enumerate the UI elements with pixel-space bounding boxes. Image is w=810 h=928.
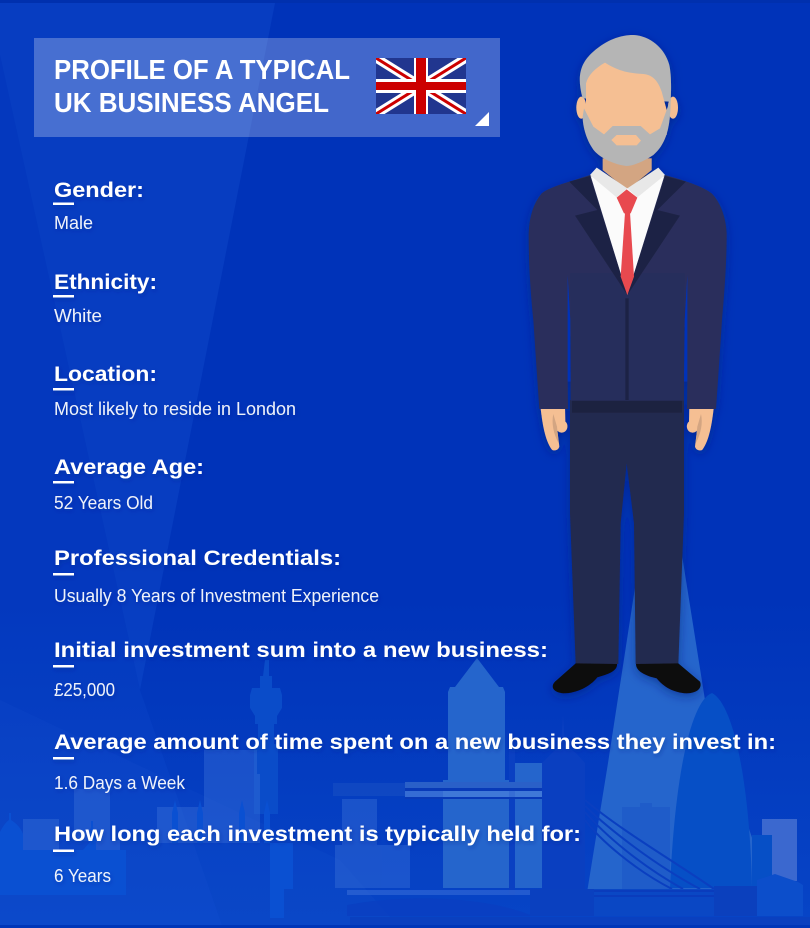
figure: shirt: [591, 176, 664, 295]
figure: left shoe: [553, 663, 617, 693]
item: professional credentials: [53, 546, 379, 606]
skyline: low buildings: [622, 803, 670, 905]
item: ethnicity: [53, 270, 157, 326]
title panel: [34, 38, 500, 137]
item: holding period: How long each investment is typically held for:: [54, 822, 581, 846]
figure: beard: [583, 98, 671, 166]
figure: lower body: [541, 400, 714, 693]
figure: sleeve gaps: [568, 275, 687, 382]
figure: trousers: [570, 400, 684, 664]
item: time spent: 1.6 Days a Week: [54, 773, 186, 793]
figure: collar: [590, 168, 665, 197]
title: PROFILE OF A TYPICAL: [54, 54, 350, 85]
item: gender: Gender:: [54, 178, 144, 202]
figure: right hand: [687, 408, 714, 450]
item: gender: [53, 178, 144, 233]
figure: right shoe: [636, 663, 701, 693]
skyline: tower bridge left tower: [443, 763, 542, 888]
title: [54, 54, 350, 118]
figure: tie: [617, 189, 637, 295]
item: holding period: [53, 822, 581, 886]
figure: mouth: [611, 135, 641, 145]
skyline: tall building: [448, 658, 505, 782]
item: ethnicity: White: [54, 306, 102, 326]
figure: jacket: [529, 175, 727, 409]
skyline: tower bridge right tower: [542, 715, 585, 890]
item: initial investment: [53, 638, 548, 700]
figure: lapels: [569, 176, 686, 295]
title: UK BUSINESS ANGEL: [54, 87, 329, 118]
skyline: gherkin: [670, 693, 752, 888]
item: average age: 52 Years Old: [54, 493, 153, 513]
item: time spent: [53, 730, 776, 793]
figure: face: [586, 63, 667, 135]
skyline illustration: [0, 658, 810, 928]
businessman figure: [529, 35, 727, 693]
item: location: Location:: [54, 362, 157, 386]
figure: placket: [625, 298, 629, 400]
item: ethnicity: Ethnicity:: [54, 270, 157, 294]
figure: hair: [580, 35, 671, 102]
item: initial investment: Initial investment sum into a new business:: [54, 638, 548, 662]
skyline: domes and spires: [0, 800, 293, 918]
skyline: bridge deck: [0, 886, 810, 928]
item: professional credentials: Usually 8 Years of Investment Experience: [54, 586, 379, 606]
item: time spent: Average amount of time spent on a new business they invest in:: [54, 730, 776, 754]
item: location: [53, 362, 296, 419]
item: professional credentials: Professional Credentials:: [54, 546, 341, 570]
item: average age: [53, 455, 204, 513]
item: location: Most likely to reside in London: [54, 399, 296, 419]
skyline: left blocks: [23, 750, 410, 888]
item: gender: Male: [54, 213, 93, 233]
figure: upper body: [529, 35, 727, 409]
icon: union jack flag: [376, 58, 466, 114]
figure: neck: [603, 158, 652, 190]
item: holding period: 6 Years: [54, 866, 111, 886]
figure: ears: [576, 97, 678, 119]
skyline: right blocks: [762, 819, 797, 881]
figure: left hand: [541, 408, 567, 450]
item: average age: Average Age:: [54, 455, 204, 479]
figure: belt: [572, 400, 682, 413]
skyline: walkway: [333, 782, 542, 799]
skyline: BT tower: [250, 660, 282, 814]
item: initial investment: £25,000: [54, 680, 115, 700]
corner triangle: [475, 112, 489, 126]
skyline: suspension cables: [585, 800, 714, 889]
